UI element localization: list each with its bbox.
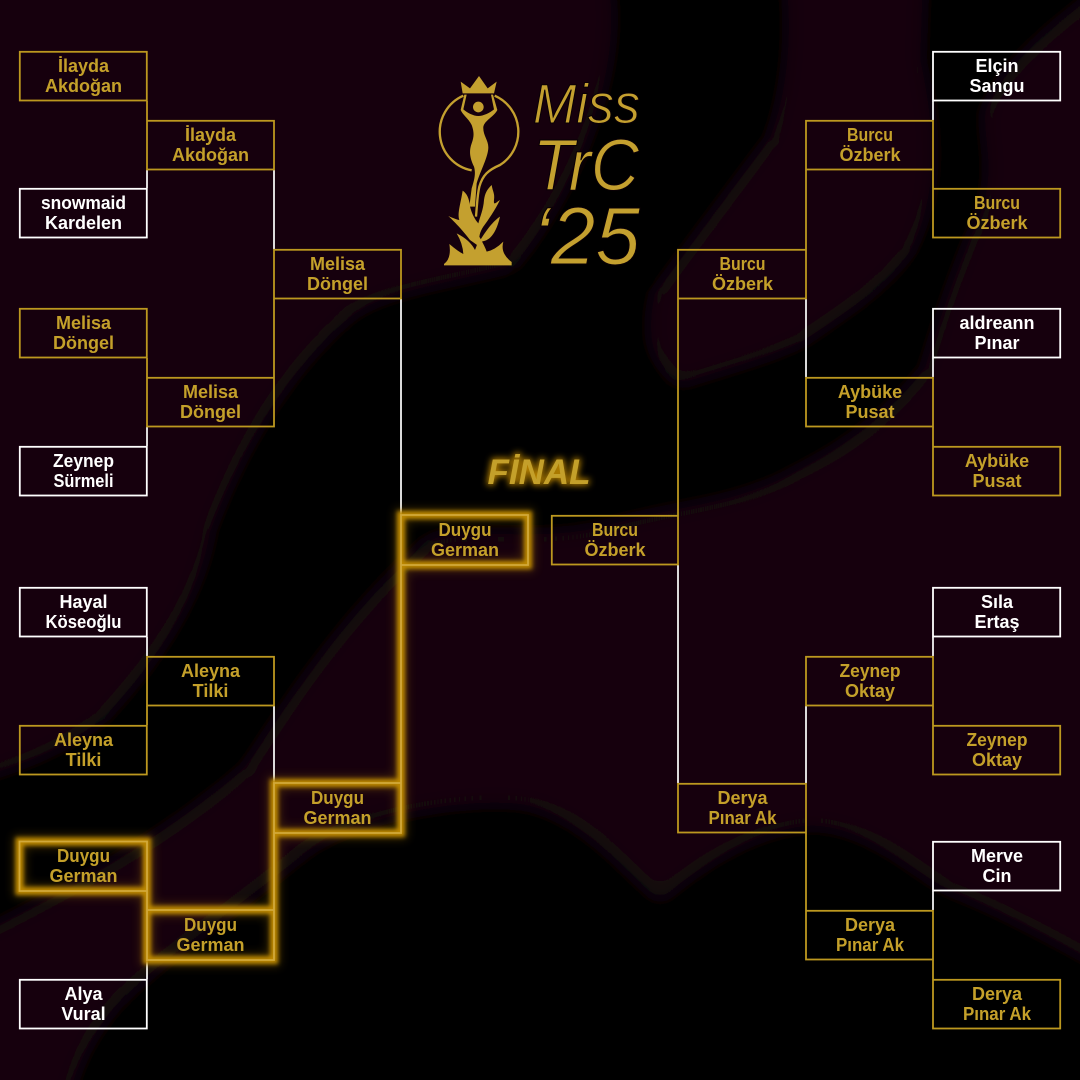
- connector lines: [147, 101, 933, 979]
- winner path glow: Duygu German: [20, 515, 528, 960]
- left semifinal: Melisa Döngel: Döngel: [307, 274, 368, 294]
- left semifinal: Duygu German: German: [303, 808, 372, 828]
- left round 2: Melisa Döngel: Döngel: [180, 402, 241, 422]
- right round 1: aldreann Pınar: aldreann: [959, 313, 1035, 333]
- left round 2: İlayda Akdoğan: Akdoğan: [172, 145, 249, 165]
- right round 1: Burcu Özberk: Özberk: [966, 213, 1028, 233]
- right round 1: Derya Pınar Ak: Derya: [972, 984, 1023, 1004]
- left round 1: Aleyna Tilki: Tilki: [66, 750, 101, 770]
- left round 1: İlayda Akdoğan: İlayda: [58, 56, 110, 76]
- right round 2: Aybüke Pusat: [806, 378, 933, 426]
- left round 1: snowmaid Kardelen: [20, 189, 147, 238]
- logo wordmark: Miss: Miss: [533, 72, 640, 135]
- finalist: Duygu German: German: [431, 540, 499, 560]
- right round 1: aldreann Pınar: [933, 309, 1060, 358]
- left round 2: Melisa Döngel: [147, 378, 274, 426]
- left round 1: Duygu German: [49, 846, 118, 886]
- logo wordmark: '25: ‘25: [533, 191, 640, 282]
- left round 1: snowmaid Kardelen: snowmaid: [41, 193, 126, 213]
- left round 1: Alya Vural: Alya: [64, 984, 103, 1004]
- left semifinal: Melisa Döngel: Melisa: [310, 254, 366, 274]
- left round 1: Melisa Döngel: [20, 309, 147, 358]
- right round 1: Merve Cin: Merve: [971, 846, 1023, 866]
- left round 1: Aleyna Tilki: [20, 726, 147, 774]
- left round 2: Aleyna Tilki: Tilki: [193, 681, 228, 701]
- left round 1: Zeynep Sürmeli: [20, 447, 147, 496]
- finalist: Burcu Özberk: Burcu: [592, 520, 638, 540]
- left round 1: İlayda Akdoğan: Akdoğan: [45, 76, 122, 96]
- left round 1: Melisa Döngel: Döngel: [53, 333, 114, 353]
- left round 1: Hayal Köseoğlu: [20, 588, 147, 636]
- right round 2: Derya Pınar Ak: Derya: [845, 915, 896, 935]
- right round 1: Elçin Sangu: Elçin: [975, 56, 1019, 76]
- left round 1: Alya Vural: [20, 980, 147, 1028]
- logo emblem: queen figure with crown and flames: [440, 76, 518, 265]
- right round 1: Burcu Özberk: Burcu: [974, 193, 1020, 213]
- right round 2: Derya Pınar Ak: Pınar Ak: [836, 935, 905, 955]
- right round 2: Burcu Özberk: Burcu: [847, 125, 893, 145]
- right semifinal: Burcu Özberk: [678, 250, 806, 298]
- right round 2: Burcu Özberk: Özberk: [839, 145, 901, 165]
- right round 1: Zeynep Oktay: Oktay: [972, 750, 1022, 770]
- right round 1: Aybüke Pusat: [933, 447, 1060, 496]
- final heading: FİNAL: [487, 453, 591, 492]
- left round 1: Aleyna Tilki: Aleyna: [54, 730, 114, 750]
- left round 1: Zeynep Sürmeli: Zeynep: [53, 451, 114, 471]
- right round 1: Sıla Ertaş: [933, 588, 1060, 636]
- left round 1: snowmaid Kardelen: Kardelen: [45, 213, 122, 233]
- right round 1: Elçin Sangu: Sangu: [969, 76, 1025, 96]
- left round 2: Aleyna Tilki: Aleyna: [181, 661, 241, 681]
- right semifinal: Derya Pınar Ak: Pınar Ak: [708, 808, 777, 828]
- final heading: FİNAL: [487, 453, 591, 492]
- left round 2: Duygu German: [176, 915, 245, 955]
- left round 1: Melisa Döngel: Melisa: [56, 313, 112, 333]
- right round 1: Sıla Ertaş: Ertaş: [974, 612, 1020, 632]
- right round 2: Aybüke Pusat: Aybüke: [838, 382, 902, 402]
- right round 1: Merve Cin: [933, 842, 1060, 890]
- finalist: Duygu German: Duygu: [438, 520, 492, 540]
- logo wordmark: TrC: TrC: [533, 126, 640, 206]
- right semifinal: Derya Pınar Ak: Derya: [717, 788, 769, 808]
- logo: Miss TrC '25: [440, 72, 640, 282]
- right round 1: Aybüke Pusat: Aybüke: [965, 451, 1029, 471]
- left round 1: İlayda Akdoğan: [20, 52, 147, 100]
- left round 2: Duygu German: Duygu: [184, 915, 237, 935]
- right round 1: Zeynep Oktay: [933, 726, 1060, 774]
- right round 2: Aybüke Pusat: Pusat: [845, 402, 895, 422]
- right round 2: Zeynep Oktay: Zeynep: [840, 661, 900, 681]
- right round 1: Derya Pınar Ak: Pınar Ak: [963, 1004, 1032, 1024]
- right round 1: aldreann Pınar: Pınar: [974, 333, 1020, 353]
- left semifinal: Melisa Döngel: [274, 250, 401, 298]
- left round 2: İlayda Akdoğan: İlayda: [185, 125, 237, 145]
- left semifinal: Duygu German: [303, 788, 372, 828]
- right semifinal: Derya Pınar Ak: [678, 784, 806, 832]
- right round 1: Sıla Ertaş: Sıla: [981, 592, 1014, 612]
- right semifinal: Burcu Özberk: Burcu: [720, 254, 766, 274]
- finalist: Burcu Özberk: Özberk: [584, 540, 646, 560]
- left round 2: Aleyna Tilki: [147, 657, 274, 706]
- right round 2: Derya Pınar Ak: [806, 911, 933, 960]
- left round 1: Duygu German: Duygu: [57, 846, 110, 866]
- right round 2: Burcu Özberk: [806, 121, 933, 170]
- right round 1: Burcu Özberk: [933, 189, 1060, 238]
- left round 2: Melisa Döngel: Melisa: [183, 382, 239, 402]
- right round 2: Zeynep Oktay: [806, 657, 933, 706]
- right round 2: Zeynep Oktay: Oktay: [845, 681, 895, 701]
- left semifinal: Duygu German: Duygu: [311, 788, 364, 808]
- left round 1: Zeynep Sürmeli: Sürmeli: [54, 471, 114, 491]
- right round 1: Elçin Sangu: [933, 52, 1060, 100]
- left round 1: Hayal Köseoğlu: Köseoğlu: [46, 612, 122, 632]
- right semifinal: Burcu Özberk: Özberk: [712, 274, 774, 294]
- right round 1: Merve Cin: Cin: [982, 866, 1012, 886]
- left round 2: Duygu German: German: [176, 935, 245, 955]
- left round 2: İlayda Akdoğan: [147, 121, 274, 170]
- finalist: Burcu Özberk: [552, 516, 678, 564]
- left round 1: Duygu German: German: [49, 866, 118, 886]
- right round 1: Derya Pınar Ak: [933, 980, 1060, 1028]
- finalist: Duygu German: [431, 520, 499, 560]
- left round 1: Alya Vural: Vural: [61, 1004, 106, 1024]
- right round 1: Zeynep Oktay: Zeynep: [966, 730, 1028, 750]
- left round 1: Hayal Köseoğlu: Hayal: [59, 592, 108, 612]
- right round 1: Aybüke Pusat: Pusat: [972, 471, 1022, 491]
